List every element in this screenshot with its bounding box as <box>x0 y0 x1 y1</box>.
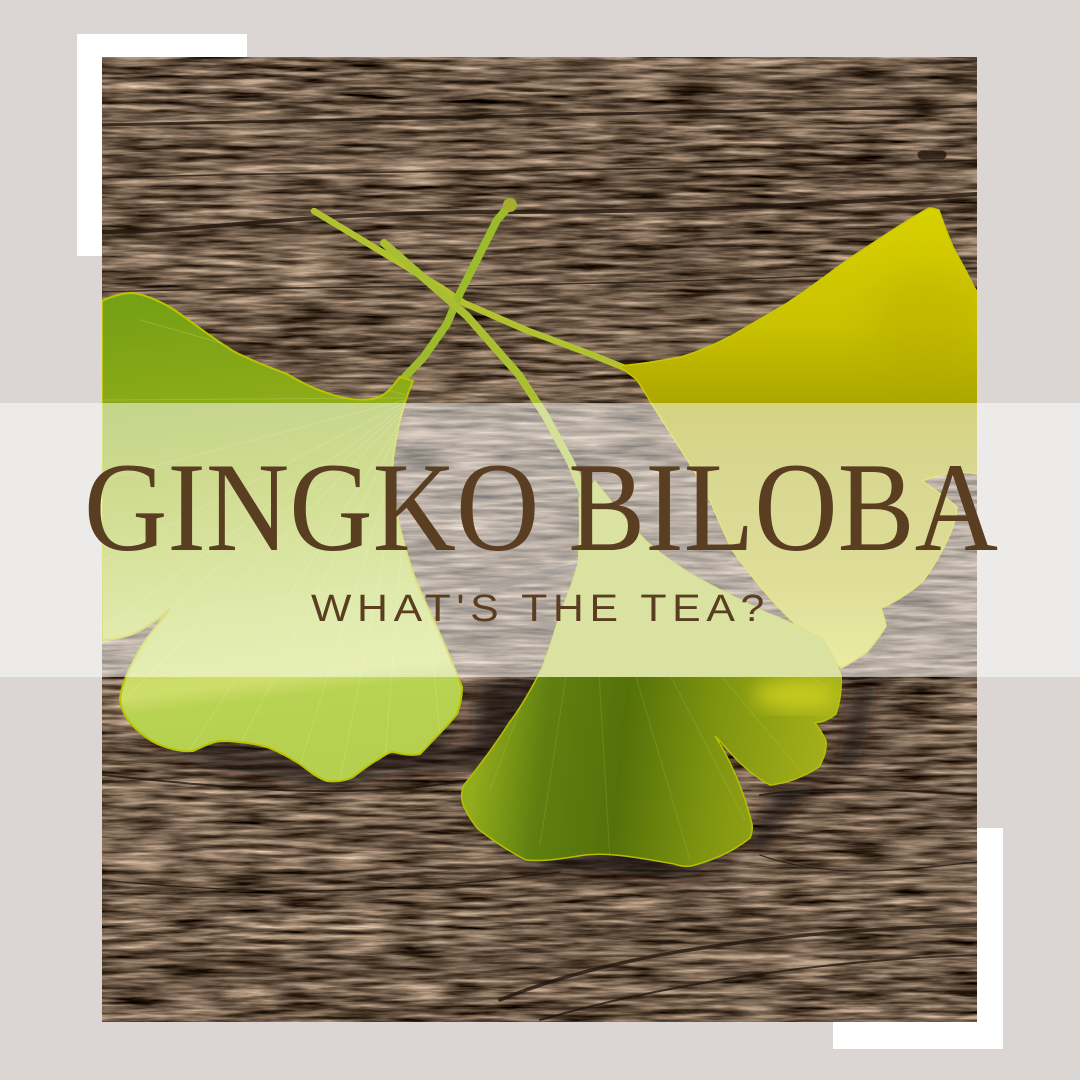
leaf veins <box>490 677 830 860</box>
translucent title band <box>0 403 1080 677</box>
leaf veins <box>102 320 460 780</box>
photo: gingko leaves on wood <box>102 57 980 1022</box>
darker patch on right leaf <box>884 280 966 344</box>
wood background <box>102 57 977 1022</box>
title: GINGKO BILOBA <box>84 438 998 578</box>
subtitle: WHAT'S THE TEA? <box>311 588 770 630</box>
stem <box>384 243 588 505</box>
left leaf <box>102 198 517 781</box>
stem <box>314 211 630 370</box>
center leaf <box>384 243 850 866</box>
corner bracket: bottom right <box>833 828 1003 1049</box>
leaf shadows <box>120 680 880 878</box>
grey plank crack behind band <box>480 545 700 590</box>
bright glow near lobe tip <box>753 679 837 711</box>
stem <box>402 204 511 380</box>
corner bracket: top left <box>77 34 247 256</box>
right leaf <box>314 208 980 668</box>
pale upper area of center leaf <box>538 481 841 677</box>
